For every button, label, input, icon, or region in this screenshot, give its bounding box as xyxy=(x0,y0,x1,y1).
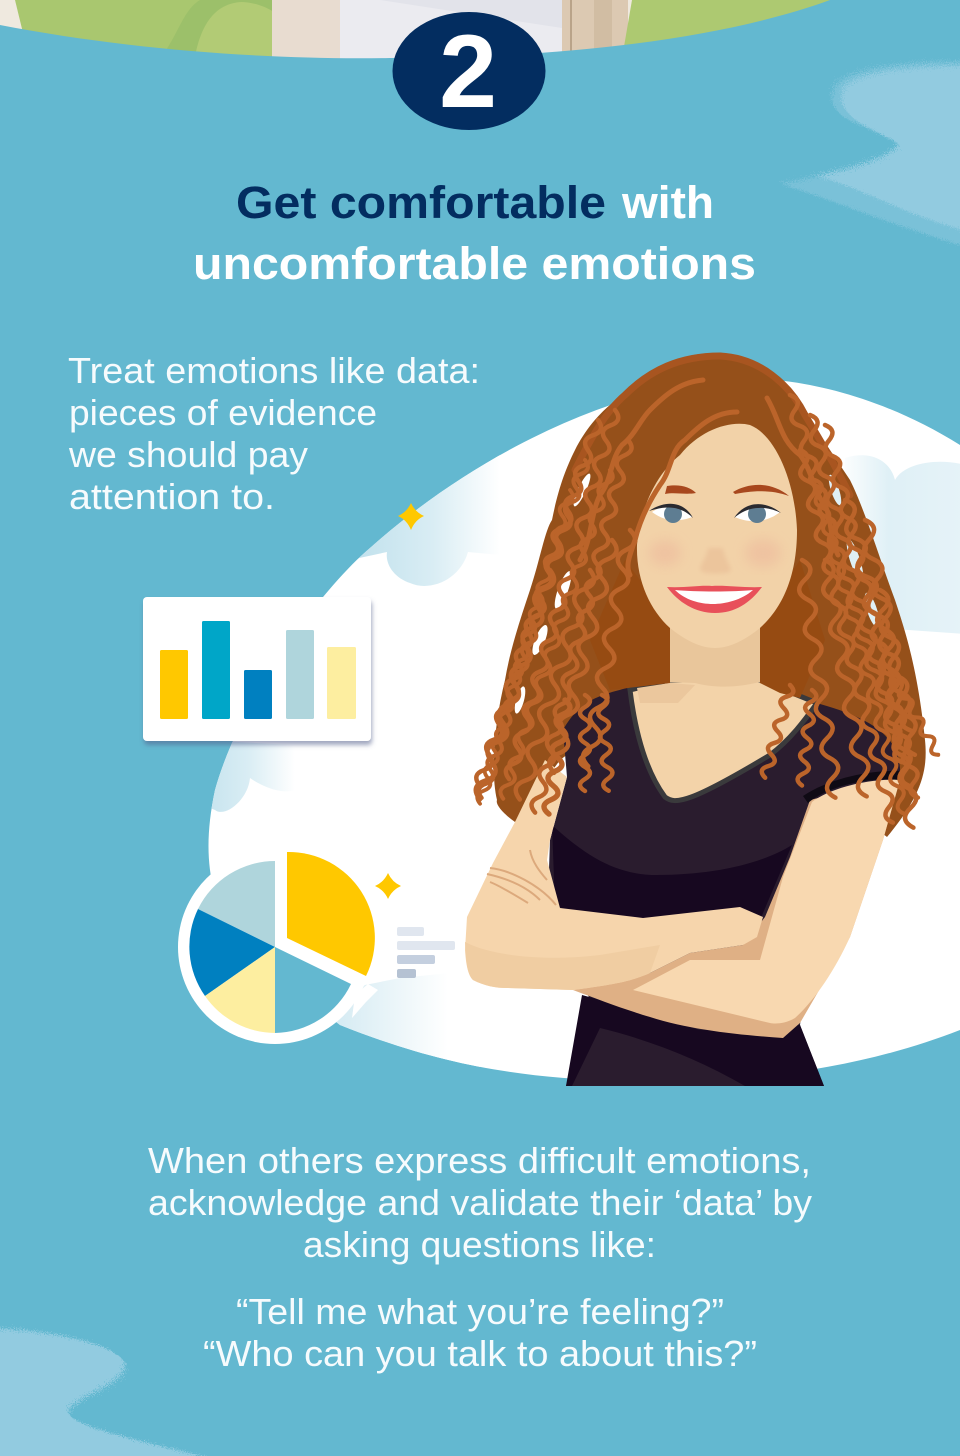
crown hair strands xyxy=(575,356,850,495)
cheeks xyxy=(649,539,781,567)
cloud: lower left xyxy=(212,742,284,812)
shirt shadow band xyxy=(552,825,792,925)
cloud: right side xyxy=(851,456,960,634)
side hair blocks xyxy=(590,560,825,698)
cloud: top right xyxy=(815,66,960,232)
top scene: trees and buildings xyxy=(0,0,960,70)
sleeve band xyxy=(803,771,900,803)
text block: example questions: “Who can you talk to about this?” xyxy=(203,1333,757,1374)
cloud: behind sparkle xyxy=(359,455,500,586)
left eyebrow xyxy=(665,485,696,494)
illustration: woman with crossed arms xyxy=(465,354,942,1086)
right arm highlight xyxy=(633,780,900,1023)
text block: treat emotions like data xyxy=(68,350,480,517)
text block: example questions: “Tell me what you’re feeling?” xyxy=(236,1291,724,1332)
hair gaps xyxy=(513,472,593,715)
right eye xyxy=(734,504,781,523)
neck xyxy=(670,620,760,687)
text block: treat emotions like data: pieces of evidence xyxy=(69,392,377,433)
text block: example questions xyxy=(203,1291,757,1374)
text block: treat emotions like data: we should pay xyxy=(68,434,308,475)
text block: treat emotions like data: Treat emotions like data: xyxy=(68,350,480,391)
shirt xyxy=(548,688,900,1086)
face xyxy=(637,424,797,648)
pie chart xyxy=(178,850,378,1044)
nose xyxy=(700,548,731,574)
left arm shade xyxy=(465,942,660,990)
cloud: top right grain band xyxy=(780,62,960,248)
smile xyxy=(667,586,762,613)
chest skin xyxy=(630,680,817,801)
cloud: beneath pie xyxy=(336,976,480,1067)
text block: treat emotions like data: attention to. xyxy=(69,476,275,517)
text block: acknowledge and validate: When others express difficult emotions, xyxy=(148,1140,811,1181)
right eyebrow xyxy=(733,485,789,496)
text block: acknowledge and validate xyxy=(148,1140,812,1265)
heading: uncomfortable emotions xyxy=(193,238,756,289)
heading xyxy=(193,177,756,289)
text block: acknowledge and validate: acknowledge and validate their ‘data’ by xyxy=(148,1182,812,1223)
bar chart card xyxy=(143,597,371,741)
text block: acknowledge and validate: asking questions like: xyxy=(303,1224,656,1265)
front hair strands xyxy=(473,380,942,829)
back hair xyxy=(494,354,926,837)
sparkle: lower xyxy=(375,873,401,899)
right hair gaps xyxy=(826,474,882,629)
badge: step number 2 xyxy=(392,12,546,130)
neck shadow xyxy=(637,683,695,703)
fingers xyxy=(487,850,556,905)
heading: Get comfortable xyxy=(236,177,606,228)
right arm base shadow xyxy=(573,778,900,1038)
heading: with xyxy=(621,177,714,228)
left arm and forearm xyxy=(465,760,763,990)
sparkle: upper xyxy=(398,503,424,530)
clouds inside the blob xyxy=(190,440,960,1090)
badge: step number 2: 2 xyxy=(439,14,497,130)
shirt lower shadow xyxy=(566,995,824,1086)
pie legend xyxy=(397,927,455,978)
white background blob xyxy=(208,378,960,1082)
left eye xyxy=(649,504,693,523)
shirt lower lighter panel xyxy=(572,1028,745,1086)
cloud: bottom left xyxy=(0,1328,235,1456)
